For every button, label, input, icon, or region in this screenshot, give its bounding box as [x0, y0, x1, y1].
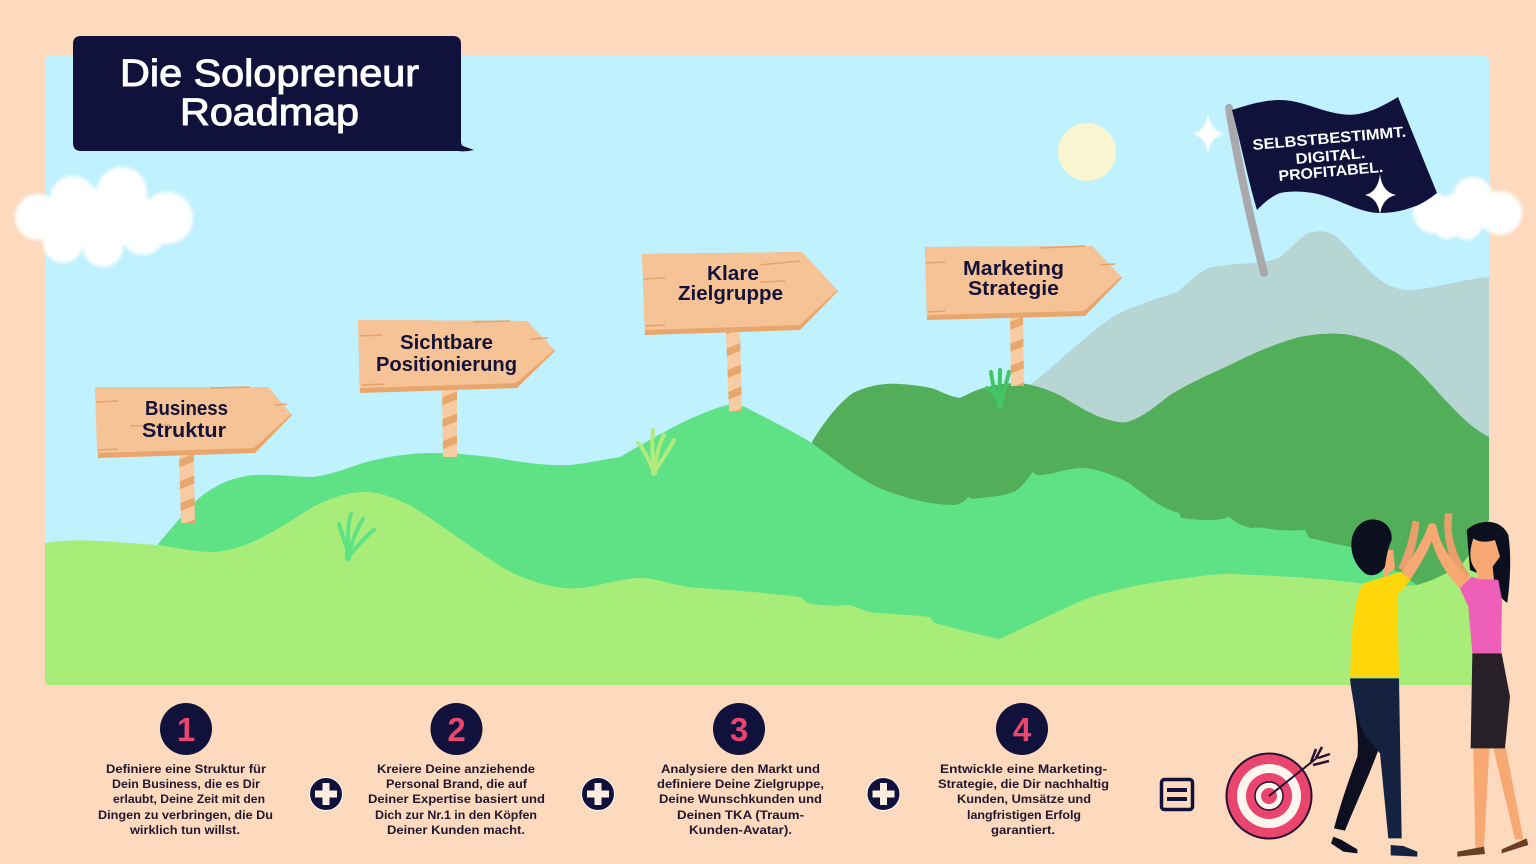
step 1 text: Definiere eine Struktur für	[106, 762, 266, 776]
grass tuft 2	[638, 430, 674, 473]
step 3 text: Deine Wunschkunden und	[659, 792, 822, 806]
signpost 1: Struktur	[142, 420, 226, 442]
woman's legs	[1473, 748, 1489, 848]
signpost 4	[925, 246, 1122, 386]
step 3: 3	[730, 711, 748, 748]
step 2 text: Kreiere Deine anziehende	[377, 762, 535, 776]
signpost 2: Sichtbare	[400, 332, 493, 354]
sun	[1058, 123, 1116, 181]
board	[925, 246, 1122, 320]
woman's front arm	[1429, 523, 1470, 590]
step 2	[368, 703, 545, 837]
step 1 text: wirklich tun willst.	[129, 823, 240, 837]
flag text: DIGITAL.	[1295, 145, 1366, 168]
signpost 3	[642, 252, 838, 411]
step 2 text: Dich zur Nr.1 in den Köpfen	[375, 808, 537, 822]
post	[1010, 317, 1024, 386]
title: Die Solopreneur	[120, 53, 419, 95]
title	[73, 36, 474, 151]
mid green hill	[158, 404, 1417, 660]
flag text: SELBSTBESTIMMT.	[1252, 124, 1407, 154]
signpost 1: Business	[145, 398, 228, 420]
man's back arm	[1398, 521, 1419, 572]
grass tuft 1	[339, 514, 374, 558]
flag pole	[1229, 108, 1264, 273]
step 3 text: Deinen TKA (Traum-	[677, 808, 804, 822]
flag cloth	[1232, 97, 1437, 213]
signpost 3: Zielgruppe	[678, 283, 783, 305]
woman's hair back	[1467, 522, 1510, 603]
step 1 text: erlaubt, Deine Zeit mit den	[113, 792, 265, 806]
cloud left	[15, 167, 193, 267]
step 3 text: Analysiere den Markt und	[661, 762, 820, 776]
signpost 2	[358, 320, 555, 457]
step 2 text: Personal Brand, die auf	[386, 777, 528, 791]
man's front arm	[1402, 523, 1435, 580]
dark green hill	[812, 334, 1489, 610]
flag text	[1252, 124, 1407, 185]
man's shirt	[1350, 572, 1411, 677]
sky	[45, 56, 1489, 685]
light green foreground hill	[45, 492, 1489, 685]
step 1: 1	[177, 711, 195, 748]
flag text: PROFITABEL.	[1278, 159, 1384, 185]
woman's shirt	[1460, 577, 1502, 653]
post	[179, 455, 195, 523]
post	[726, 332, 742, 411]
step 4 text: Kunden, Umsätze und	[957, 792, 1091, 806]
woman's back arm	[1444, 513, 1470, 585]
step 4 text: Strategie, die Dir nachhaltig	[938, 777, 1109, 791]
title: Roadmap	[180, 92, 359, 134]
board	[95, 387, 292, 458]
step 3 text: Kunden-Avatar).	[689, 823, 792, 837]
signpost 4: Strategie	[968, 278, 1059, 300]
cloud right	[1413, 177, 1522, 240]
post	[442, 390, 457, 457]
step 3	[657, 703, 824, 837]
step 4: 4	[1013, 711, 1032, 748]
number badge 1	[160, 703, 212, 755]
signpost 1	[95, 387, 292, 523]
step 1 text: Dein Business, die es Dir	[112, 777, 260, 791]
step 4 text	[938, 762, 1109, 837]
panel: landscape	[45, 56, 1489, 685]
step 2: 2	[447, 711, 466, 748]
woman's skirt	[1471, 653, 1510, 748]
woman's shoes	[1457, 847, 1485, 857]
step 1 text: Dingen zu verbringen, die Du	[98, 808, 273, 822]
plus icon 2	[582, 778, 614, 810]
signpost 4: Marketing	[963, 258, 1064, 280]
equals icon	[1162, 780, 1192, 810]
step 1 text	[98, 762, 273, 837]
step 3 text	[657, 762, 824, 837]
man's neck and ear	[1383, 550, 1395, 578]
woman	[1429, 513, 1528, 857]
number badge 4	[996, 703, 1048, 755]
sparkle left	[1193, 113, 1224, 155]
step 2 text: Deiner Expertise basiert und	[368, 792, 545, 806]
step 1	[98, 703, 273, 837]
board	[642, 252, 838, 335]
step 4 text: garantiert.	[991, 823, 1055, 837]
icon: target with arrow	[1226, 747, 1330, 838]
people high-five	[1331, 513, 1528, 857]
man	[1331, 519, 1435, 857]
step 4 text: Entwickle eine Marketing-	[940, 762, 1107, 776]
number badge 3	[713, 703, 765, 755]
step 4 text: langfristigen Erfolg	[967, 808, 1081, 822]
signpost 3: Klare	[707, 263, 759, 285]
number badge 2	[430, 703, 482, 755]
signpost 2: Positionierung	[376, 354, 517, 376]
board	[358, 320, 555, 393]
step 2 text	[368, 762, 545, 837]
plus icon 1	[310, 778, 342, 810]
woman's face	[1470, 538, 1500, 580]
step 2 text: Deiner Kunden macht.	[387, 823, 525, 837]
step 4	[938, 703, 1109, 837]
step 3 text: definiere Deine Zielgruppe,	[657, 777, 824, 791]
man's front leg	[1350, 678, 1402, 838]
flag	[1229, 97, 1437, 273]
grey mountain	[1030, 231, 1489, 500]
sparkle on flag	[1365, 174, 1396, 215]
man's shoes	[1331, 837, 1357, 853]
man's hair	[1351, 519, 1392, 575]
grass tuft 3	[987, 370, 1009, 405]
plus icon 3	[867, 778, 900, 810]
man's back leg	[1334, 697, 1380, 831]
